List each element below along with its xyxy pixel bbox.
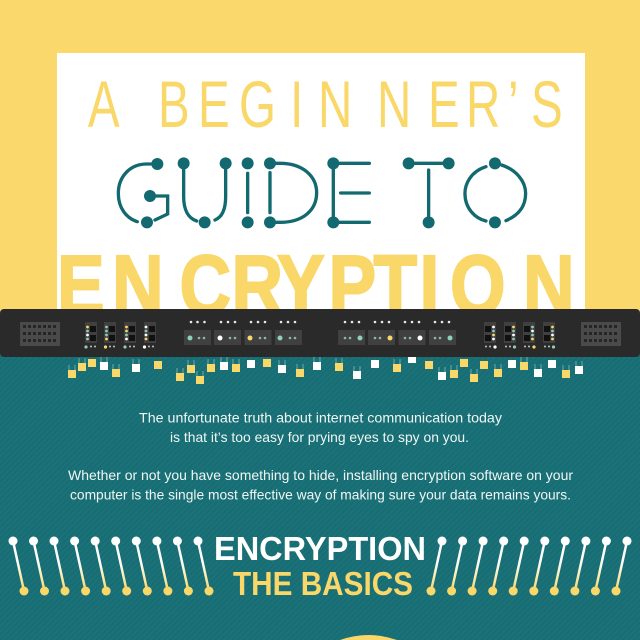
intro paragraph one: is that it’s too easy for prying eyes to spy on you. [170, 429, 469, 445]
server rack bar [0, 309, 640, 357]
title: Guide To circuit lettering [118, 157, 526, 228]
left wide status modules [184, 321, 302, 345]
intro paragraph two: computer is the single most effective way of making sure your data remains yours. [70, 486, 571, 502]
intro paragraph two [68, 467, 573, 502]
left speaker grill [20, 322, 60, 346]
right pin row [426, 536, 632, 596]
title: A Beginner's: A BEGINNER’S [88, 68, 563, 142]
intro paragraph one: The unfortunate truth about internet communication today [139, 410, 502, 426]
right speaker grill [581, 322, 621, 346]
intro paragraph one [139, 410, 502, 445]
right tall port modules [484, 322, 555, 349]
heading: The Basics: THE BASICS [233, 565, 413, 602]
title: Encryption: ENCRYPTION [57, 237, 575, 332]
heading: Encryption: ENCRYPTION [214, 530, 426, 567]
hanging data tags [68, 355, 583, 384]
left pin row [8, 536, 214, 596]
yellow circle at bottom edge [340, 635, 397, 640]
yellow top background [0, 0, 640, 340]
intro paragraph two: Whether or not you have something to hide, installing encryption software on your [68, 467, 573, 483]
left tall port modules [84, 322, 156, 349]
white title panel [57, 53, 585, 313]
right wide status modules [338, 321, 456, 345]
rack body [0, 309, 640, 357]
teal hatched background [0, 340, 640, 640]
